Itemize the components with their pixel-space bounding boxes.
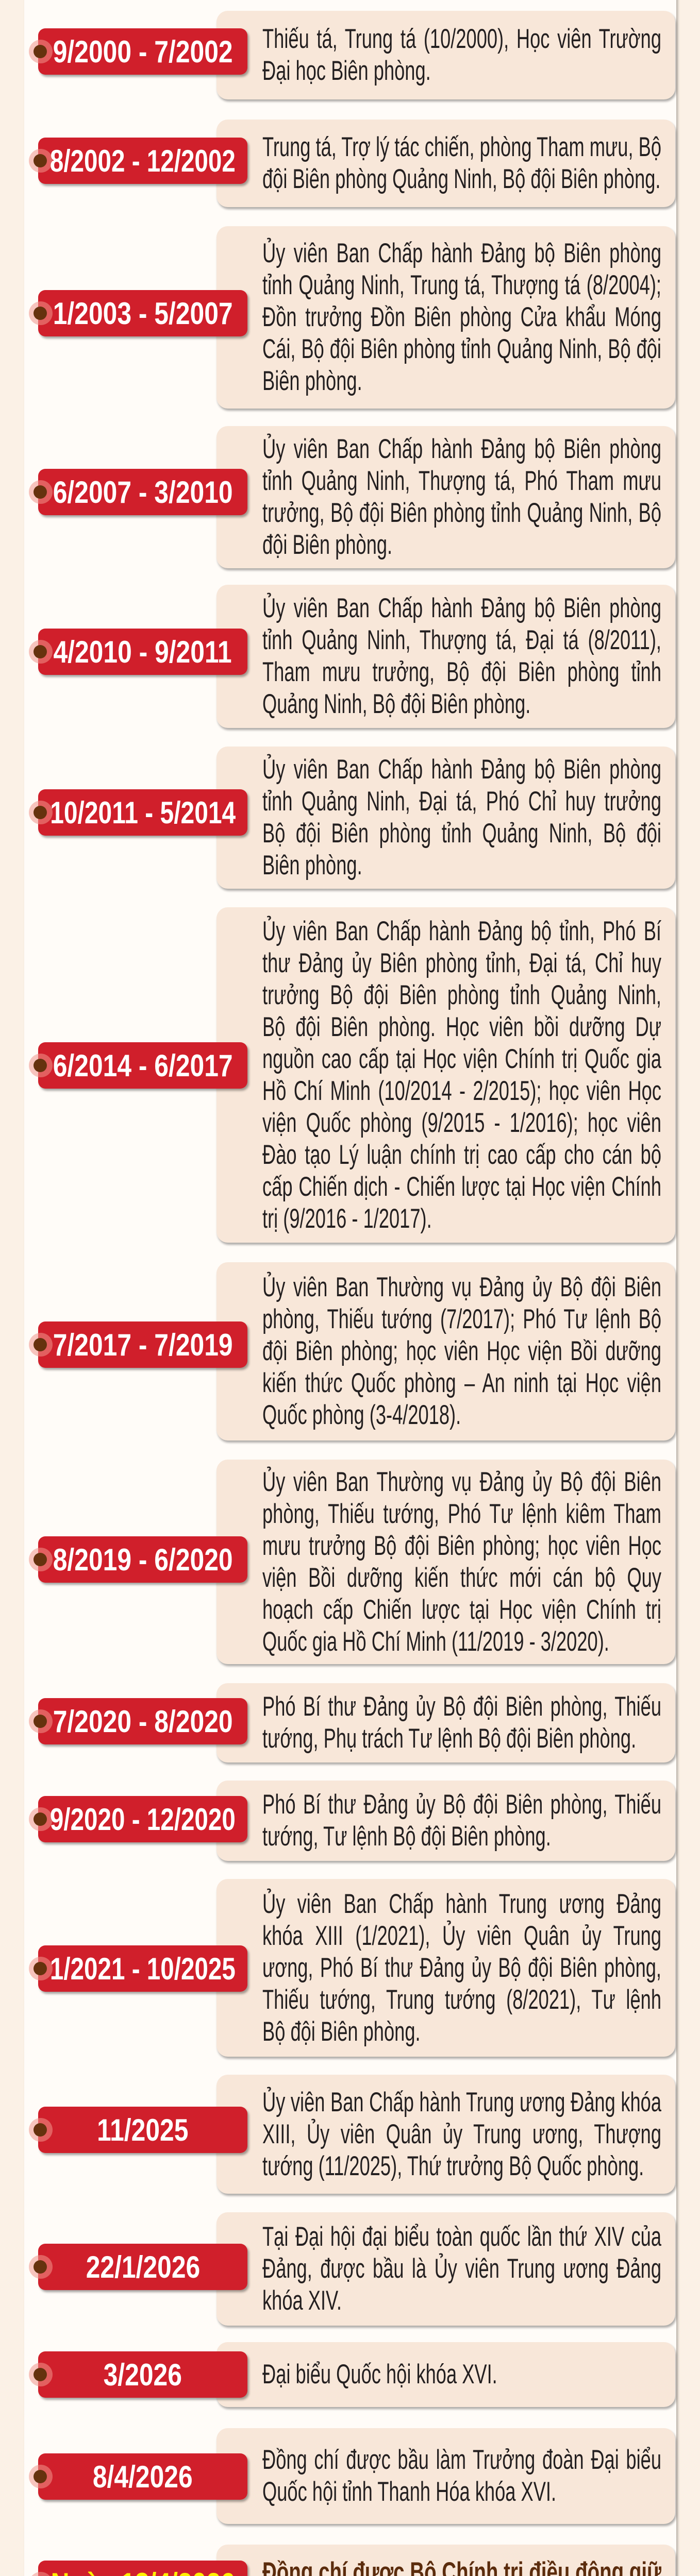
card: XIII, Ủy viên Quân ủy Trung ương, Thượng	[262, 2119, 661, 2149]
card: Tại Đại hội đại biểu toàn quốc lần thứ XIV của	[262, 2222, 661, 2252]
card: Đại biểu Quốc hội khóa XVI.	[262, 2359, 497, 2389]
card	[216, 2212, 675, 2326]
card: Quốc phòng (3-4/2018).	[262, 1400, 461, 1430]
card: Ủy viên Ban Chấp hành Đảng bộ Biên phòng	[262, 593, 661, 623]
date tag	[38, 2351, 247, 2398]
date tag	[38, 1042, 247, 1089]
card: Đào tạo Lý luận chính trị cao cấp cho cán bộ	[262, 1140, 661, 1170]
card: tỉnh Quảng Ninh, Đại tá, Phó Chỉ huy trưởng	[262, 786, 661, 817]
date tag: 3/2026	[104, 2358, 182, 2392]
card: Trung tá, Trợ lý tác chiến, phòng Tham mưu, Bộ	[262, 132, 661, 162]
date tag	[38, 1536, 247, 1583]
card: Ủy viên Ban Thường vụ Đảng ủy Bộ đội Biên	[262, 1466, 661, 1497]
card	[216, 2545, 675, 2576]
card: nguồn cao cấp tại Học viện Chính trị Quốc gia	[262, 1044, 661, 1074]
card	[216, 747, 675, 889]
card	[216, 2342, 675, 2407]
card: viện Bồi dưỡng kiến thức mới cán bộ Quy	[262, 1562, 661, 1593]
date tag	[38, 1698, 247, 1744]
card: viện Quốc phòng (9/2015 - 1/2016); học viên	[262, 1108, 661, 1138]
card: Quảng Ninh, Bộ đội Biên phòng.	[262, 689, 530, 719]
date tag	[38, 28, 247, 75]
card: Ủy viên Ban Chấp hành Đảng bộ Biên phòng	[262, 434, 661, 464]
card: Cái, Bộ đội Biên phòng tỉnh Quảng Ninh, Bộ đội	[262, 334, 661, 364]
card	[216, 1683, 675, 1762]
timeline item: 3/2026	[29, 2342, 677, 2410]
card: tỉnh Quảng Ninh, Trung tá, Thượng tá (8/2004);	[262, 270, 661, 300]
date tag: 7/2020 - 8/2020	[53, 1704, 232, 1738]
card: Quốc gia Hồ Chí Minh (11/2019 - 3/2020).	[262, 1626, 609, 1657]
timeline item: 11/2025	[29, 2075, 677, 2197]
card: thư Đảng ủy Biên phòng tỉnh, Đại tá, Chỉ huy	[262, 948, 661, 978]
date tag	[38, 138, 247, 184]
date tag: 1/2021 - 10/2025	[50, 1952, 236, 1986]
timeline item: 6/2007 - 3/2010	[29, 426, 677, 572]
card: Phó Bí thư Đảng ủy Bộ đội Biên phòng, Thiếu	[262, 1691, 661, 1722]
card: trưởng Bộ đội Biên phòng tỉnh Quảng Ninh,	[262, 980, 661, 1010]
card: Bộ đội Biên phòng. Học viên bồi dưỡng Dự	[262, 1012, 661, 1042]
card: Biên phòng.	[262, 850, 362, 880]
card: khóa XIII (1/2021), Ủy viên Quân ủy Trung	[262, 1921, 661, 1951]
date tag: 22/1/2026	[86, 2249, 200, 2284]
timeline item: 22/1/2026	[29, 2212, 677, 2329]
card: Ủy viên Ban Thường vụ Đảng ủy Bộ đội Biên	[262, 1272, 661, 1302]
date tag: 8/2019 - 6/2020	[53, 1543, 232, 1577]
card	[216, 11, 675, 99]
date tag	[38, 629, 247, 675]
date tag	[38, 2453, 247, 2500]
date tag: 8/2002 - 12/2002	[50, 143, 236, 178]
card: tướng (11/2025), Thứ trưởng Bộ Quốc phòng.	[262, 2150, 644, 2181]
date tag	[38, 2107, 247, 2153]
date tag	[38, 1796, 247, 1842]
date tag: 9/2020 - 12/2020	[50, 1802, 236, 1836]
card: khóa XIV.	[262, 2285, 342, 2316]
timeline item: 9/2000 - 7/2002	[29, 11, 677, 103]
date tag: 7/2017 - 7/2019	[53, 1327, 232, 1362]
date tag: 4/2010 - 9/2011	[54, 635, 232, 669]
card: tỉnh Quảng Ninh, Thượng tá, Đại tá (8/2011),	[262, 625, 661, 655]
card: Ủy viên Ban Chấp hành Đảng bộ Biên phòng	[262, 238, 661, 268]
date tag	[38, 2561, 247, 2576]
card	[216, 2428, 675, 2524]
timeline item: 8/2019 - 6/2020	[29, 1460, 677, 1667]
timeline item: 7/2020 - 8/2020	[29, 1683, 677, 1766]
card: đội Biên phòng.	[262, 530, 392, 560]
card: tướng, Tư lệnh Bộ đội Biên phòng.	[262, 1821, 551, 1852]
timeline item: 1/2021 - 10/2025	[29, 1879, 677, 2060]
card: Đồn trưởng Đồn Biên phòng Cửa khẩu Móng	[262, 302, 661, 332]
card: đội Biên phòng Quảng Ninh, Bộ đội Biên phòng.	[262, 164, 661, 194]
date tag	[38, 290, 247, 336]
card: Hồ Chí Minh (10/2014 - 2/2015); học viên Học	[262, 1076, 661, 1106]
card	[216, 1879, 675, 2057]
card: Bộ đội Biên phòng tỉnh Quảng Ninh, Bộ đội	[262, 818, 661, 849]
card	[216, 907, 675, 1243]
card: Ủy viên Ban Chấp hành Đảng bộ tỉnh, Phó Bí	[262, 916, 661, 946]
timeline item: Ngày 13/4/2026 (highlight)	[32, 2545, 677, 2576]
card	[216, 1262, 675, 1440]
timeline item: 8/2002 - 12/2002	[29, 120, 677, 210]
card: Ủy viên Ban Chấp hành Đảng bộ Biên phòng	[262, 754, 661, 785]
card: Quốc hội tỉnh Thanh Hóa khóa XVI.	[262, 2477, 556, 2507]
card	[216, 1460, 675, 1664]
card	[216, 426, 675, 568]
card: trị (9/2016 - 1/2017).	[262, 1204, 432, 1233]
card: ương, Phó Bí thư Đảng ủy Bộ đội Biên phòng,	[262, 1953, 661, 1982]
card: trưởng, Bộ đội Biên phòng tỉnh Quảng Ninh, Bộ	[262, 498, 661, 528]
card: Bộ đội Biên phòng.	[262, 2016, 421, 2046]
date tag	[38, 1321, 247, 1368]
date tag: 1/2003 - 5/2007	[53, 296, 232, 331]
card: kiến thức Quốc phòng – An ninh tại Học viện	[262, 1368, 661, 1398]
date tag: 8/4/2026	[93, 2460, 193, 2494]
card: phòng, Thiếu tướng, Phó Tư lệnh kiêm Tham	[262, 1498, 661, 1529]
card: Phó Bí thư Đảng ủy Bộ đội Biên phòng, Thiếu	[262, 1789, 661, 1820]
card: Thiếu tá, Trung tá (10/2000), Học viên Trường	[262, 24, 661, 54]
card: phòng, Thiếu tướng (7/2017); Phó Tư lệnh Bộ	[262, 1304, 661, 1334]
card: Đại học Biên phòng.	[262, 56, 431, 86]
card: Ủy viên Ban Chấp hành Trung ương Đảng	[262, 1889, 661, 1919]
timeline item: 7/2017 - 7/2019	[29, 1262, 677, 1444]
date tag	[38, 2244, 247, 2290]
card	[216, 226, 675, 409]
timeline item: 4/2010 - 9/2011	[29, 585, 677, 732]
date tag: 6/2007 - 3/2010	[53, 475, 232, 509]
date tag: 10/2011 - 5/2014	[50, 795, 236, 829]
date tag: 9/2000 - 7/2002	[53, 34, 232, 69]
card: Biên phòng.	[262, 366, 362, 396]
card: tỉnh Quảng Ninh, Thượng tá, Phó Tham mưu	[262, 466, 661, 496]
card: Ủy viên Ban Chấp hành Trung ương Đảng khóa	[262, 2087, 661, 2117]
date tag	[38, 1945, 247, 1992]
date tag	[38, 469, 247, 515]
timeline item: 8/4/2026	[29, 2428, 677, 2528]
date tag: 11/2025	[97, 2112, 189, 2147]
card: Đồng chí được bầu làm Trưởng đoàn Đại biểu	[262, 2445, 661, 2475]
card	[216, 120, 675, 207]
card: đội Biên phòng; học viên Học viện Bồi dưỡng	[262, 1336, 661, 1366]
card: Tham mưu trưởng, Bộ đội Biên phòng tỉnh	[262, 657, 661, 687]
date tag	[38, 789, 247, 836]
card: Thiếu tướng, Trung tướng (8/2021), Tư lệnh	[262, 1985, 661, 2014]
date tag: 6/2014 - 6/2017	[53, 1048, 232, 1083]
card	[216, 585, 675, 728]
timeline item: 6/2014 - 6/2017	[29, 907, 677, 1246]
card: hoạch cấp Chiến lược tại Học viện Chính trị	[262, 1594, 661, 1625]
card: cấp Chiến dịch - Chiến lược tại Học viện Chính	[262, 1172, 661, 1201]
card: mưu trưởng Bộ đội Biên phòng; học viên Học	[262, 1530, 661, 1561]
card	[216, 2075, 675, 2194]
card: tướng, Phụ trách Tư lệnh Bộ đội Biên phòng.	[262, 1723, 636, 1754]
timeline item: 10/2011 - 5/2014	[29, 747, 677, 892]
timeline item: 1/2003 - 5/2007	[29, 226, 677, 412]
card: Đảng, được bầu là Ủy viên Trung ương Đảng	[262, 2253, 661, 2284]
card	[216, 1781, 675, 1861]
timeline item: 9/2020 - 12/2020	[29, 1781, 677, 1864]
